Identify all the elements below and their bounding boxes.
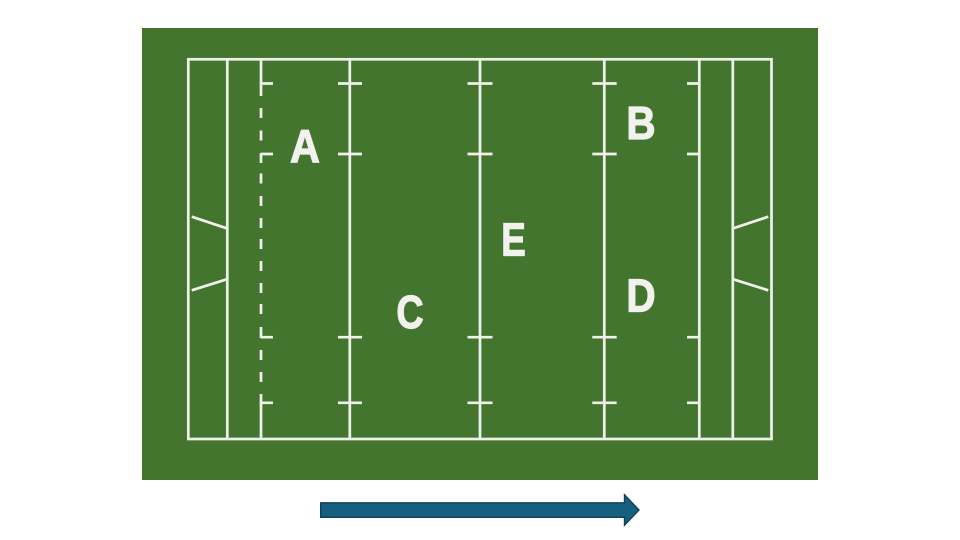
right dead ball line [731,59,734,439]
label E: E [501,214,526,265]
left goal post lines [192,217,227,290]
line: right try [698,59,701,439]
dashed try zone line [260,59,262,439]
hash marks [261,84,699,403]
arrow pointing right [321,495,639,525]
pitch markings [188,59,772,439]
panel: green pitch background [142,28,818,480]
left dead ball line [226,59,229,439]
label B: B [626,99,656,150]
line: halfway [479,59,481,439]
label C: C [396,286,424,338]
line: left 22 [348,59,351,439]
label A: A [290,121,320,173]
label D: D [626,271,656,322]
right goal post lines [733,217,768,290]
line: right 22 [603,59,606,439]
boundary [188,59,772,439]
